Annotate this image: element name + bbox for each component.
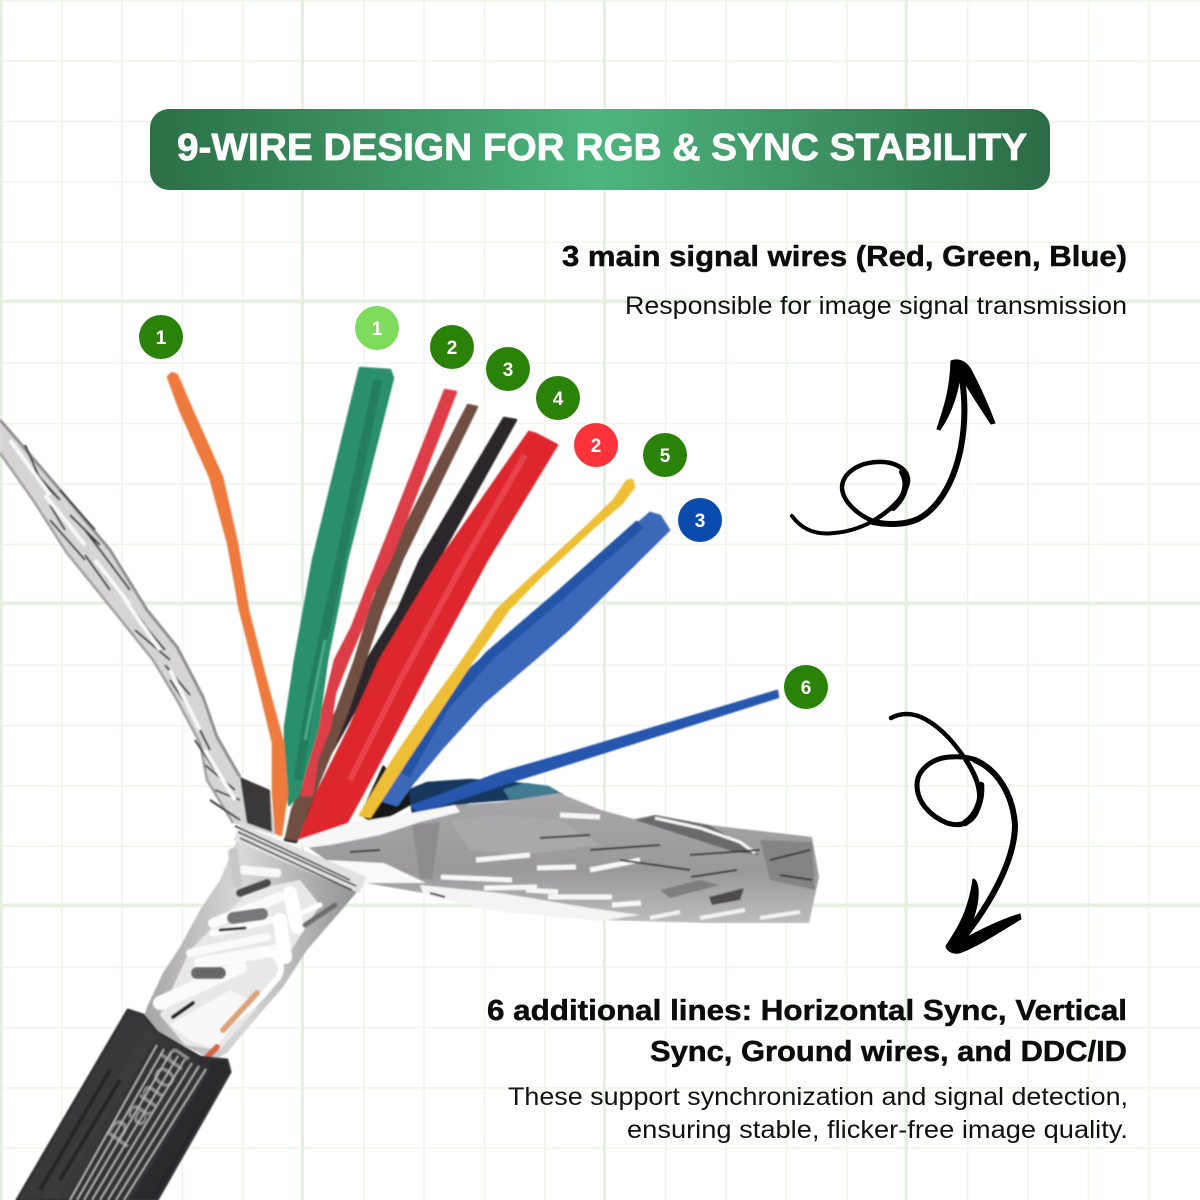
wire: blue fine: [412, 691, 778, 812]
badge: 3 blue wire: [678, 498, 722, 542]
text block: additional lines: These support synchronization and signal detection,: [508, 1083, 1128, 1111]
text block: main signal wires: 3 main signal wires (Red, Green, Blue): [562, 241, 1127, 273]
wire: red thick: [300, 432, 557, 838]
badge: 5: [643, 433, 687, 477]
wire: blue fine underlay and teal patch: [410, 780, 562, 815]
text block: additional lines: ensuring stable, flicker-free image quality.: [627, 1116, 1128, 1144]
badge: 3: 3: [503, 360, 513, 381]
badge: 1 green wire: 1: [372, 319, 383, 340]
badge: 2 red wire: 2: [591, 436, 601, 457]
collar band: [235, 826, 363, 890]
cable illustration: [0, 368, 819, 1200]
left braid strand: [0, 420, 275, 835]
wire: black: [285, 418, 516, 842]
text block: additional lines: Sync, Ground wires, and DDC/ID: [650, 1036, 1127, 1068]
black jacket: [17, 1010, 230, 1200]
badge: 2: [430, 325, 474, 369]
badge: 4: 4: [553, 389, 564, 410]
wire: green: [285, 368, 393, 805]
wire: thin red: [302, 390, 456, 795]
badge: 1 orange wire: 1: [156, 328, 167, 349]
badge: 3 blue wire: 3: [695, 511, 705, 532]
title banner: 9-WIRE DESIGN FOR RGB & SYNC STABILITY: [177, 127, 1027, 169]
badge: 2: 2: [447, 338, 457, 359]
text block: main signal wires: Responsible for image signal transmission: [625, 292, 1127, 320]
badge: 4: [536, 376, 580, 420]
number badges: [139, 306, 828, 709]
badge: 3: [486, 347, 530, 391]
wires: [168, 368, 778, 842]
text block: additional lines: [487, 995, 1128, 1144]
badge: 6: [784, 665, 828, 709]
arrow: curly arrow down to additional lines: [891, 714, 1021, 953]
text block: additional lines: 6 additional lines: Horizontal Sync, Vertical: [487, 995, 1127, 1027]
text block: main signal wires: [562, 241, 1127, 320]
wire: blue thick: [380, 513, 669, 805]
title banner: [150, 109, 1050, 190]
dark backing behind fan of wires: [360, 765, 420, 825]
wire: orange: [168, 373, 287, 835]
wire: yellow: [360, 480, 634, 817]
badge: 5: 5: [660, 446, 671, 467]
badge: 1 green wire: [355, 306, 399, 350]
foil ribbon: [298, 793, 819, 923]
wire: brown: [286, 405, 477, 840]
badge: 1 orange wire: [139, 315, 183, 359]
badge: 6: 6: [801, 678, 811, 699]
badge: 2 red wire: [574, 423, 618, 467]
watermark: Panoh: [98, 1037, 198, 1155]
arrow: curly arrow up to signal wires: [792, 360, 995, 533]
foil and braid tube: [143, 840, 363, 1060]
